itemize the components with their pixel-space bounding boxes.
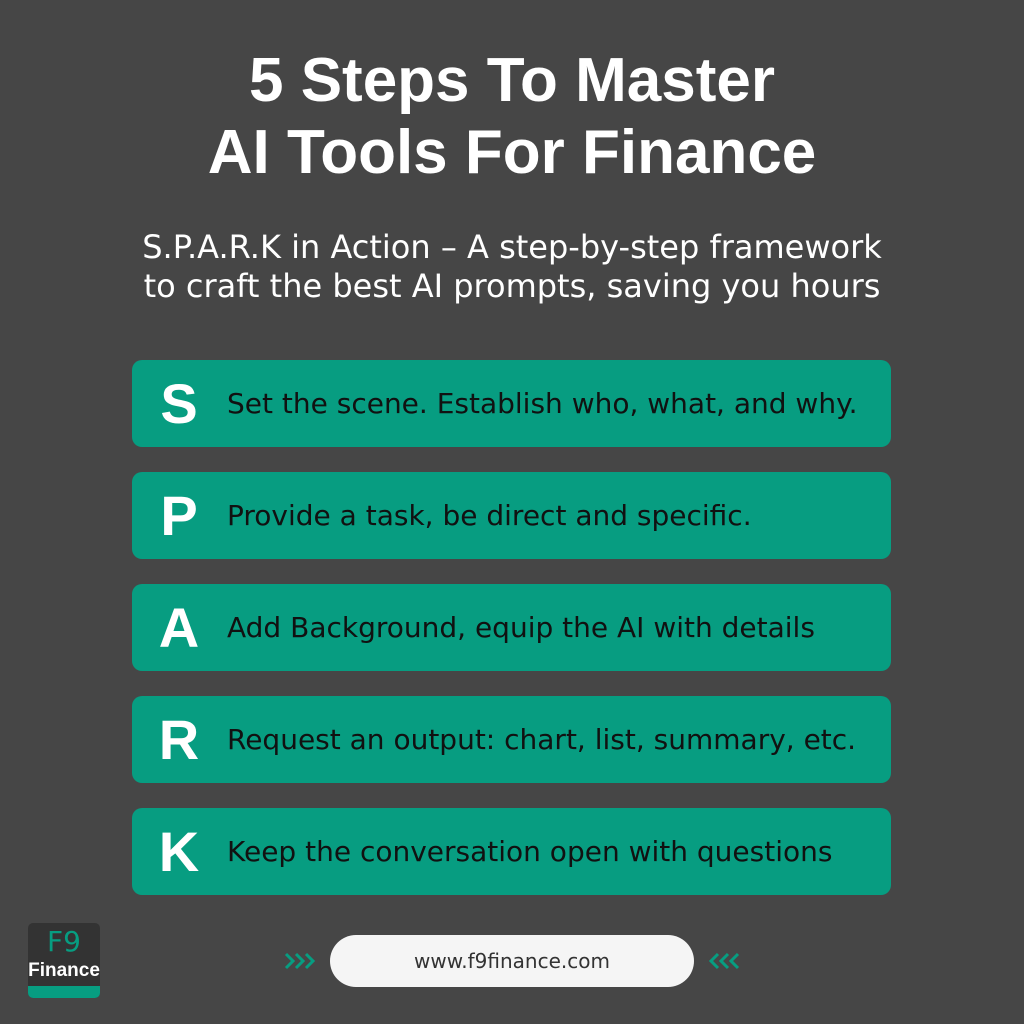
row: P: Provide a task, be direct and specific. [227, 499, 752, 532]
row: K [132, 808, 891, 895]
logo: Finance [28, 960, 100, 981]
url pill: www.f9finance.com [414, 949, 610, 973]
row: P: P [160, 484, 198, 547]
title [208, 46, 816, 187]
row: A: A [159, 596, 199, 659]
row: K: K [159, 820, 199, 883]
row: A: Add Background, equip the AI with details [227, 611, 815, 644]
row: K: Keep the conversation open with questions [227, 835, 832, 868]
row: R: R [159, 708, 199, 771]
row: S: Set the scene. Establish who, what, and why. [227, 387, 858, 420]
logo: F9 [47, 925, 81, 958]
subtitle [142, 228, 882, 305]
row: S: S [160, 372, 198, 435]
arrows left [285, 953, 315, 969]
url pill [330, 935, 694, 987]
subtitle: S.P.A.R.K in Action – A step-by-step framework [142, 228, 882, 266]
row: P [132, 472, 891, 559]
row: R: Request an output: chart, list, summary, etc. [227, 723, 856, 756]
row: S [132, 360, 891, 447]
arrows right [709, 953, 739, 969]
title: AI Tools For Finance [208, 118, 816, 187]
subtitle: to craft the best AI prompts, saving you hours [144, 267, 880, 305]
row: R [132, 696, 891, 783]
title: 5 Steps To Master [249, 46, 775, 115]
logo [28, 923, 100, 998]
row: A [132, 584, 891, 671]
